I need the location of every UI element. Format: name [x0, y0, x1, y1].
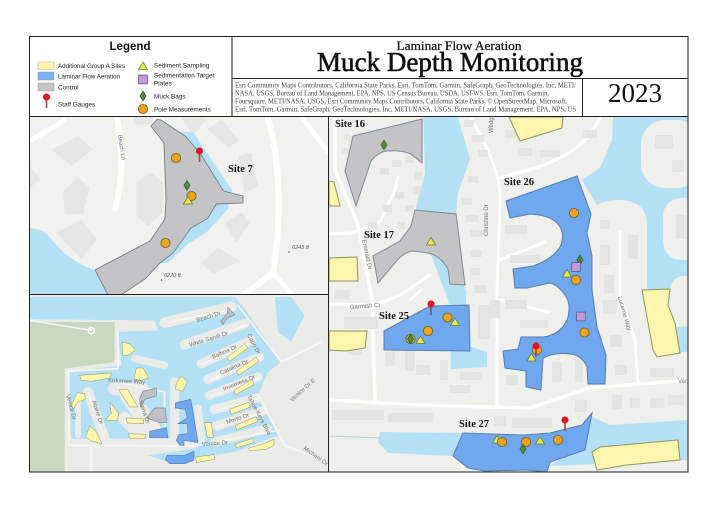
- attribution text: Foursquare, METI/NASA, USGS, Esri Community Maps Contributors, California State Parks, © OpenStreetMap, Microsoft,: [235, 98, 567, 106]
- site 7 channel water: [155, 132, 232, 263]
- legend item: additional group A sites: [38, 62, 125, 70]
- site labels: Site 27: [459, 419, 489, 430]
- site 16 control polygon: [345, 119, 422, 206]
- roads: [329, 117, 688, 438]
- legend item: control: [38, 83, 79, 92]
- elevation labels: 6220 ft: [164, 273, 181, 279]
- park: [30, 322, 115, 472]
- locator road labels: White Sandi Dr: [189, 331, 229, 349]
- site 7 control polygon: [95, 120, 243, 295]
- locator road labels: Venice Dr: [64, 394, 77, 421]
- site 27 aeration polygon: [453, 413, 592, 472]
- frame lines: [29, 36, 688, 472]
- panel: legend: [29, 36, 232, 116]
- legend item: sedimentation target plates: Plates: [154, 80, 172, 88]
- legend item: control: Control: [58, 84, 79, 92]
- locator road labels: Beach Dr: [196, 311, 222, 324]
- locator road labels: Kokanee Way: [108, 378, 145, 386]
- control polygons: [140, 307, 235, 423]
- locator road labels: Balboa Dr: [211, 344, 238, 361]
- legend item: sediment sampling: Sediment Sampling: [154, 62, 210, 70]
- locator road labels: Inverness Dr: [223, 375, 256, 393]
- road labels: Lucerne Way: [616, 296, 632, 331]
- markers site 16 and 17: [381, 140, 436, 245]
- road labels: Christine Dr: [484, 204, 490, 236]
- site 26 aeration polygon: [503, 176, 606, 390]
- site 7 lake water: [28, 227, 108, 295]
- locator road labels: Sierra Dr: [137, 400, 150, 424]
- legend item: laminar flow aeration: Laminar Flow Aeration: [58, 74, 120, 80]
- road label: beach ln: Beach Ln: [116, 134, 125, 160]
- road labels: Ven: [678, 379, 688, 385]
- legend item: laminar flow aeration: [38, 72, 120, 80]
- site labels: Site 25: [379, 311, 409, 322]
- road labels: [350, 100, 688, 385]
- panel: title block: [317, 38, 583, 77]
- legend item: sedimentation target plates: [139, 72, 215, 88]
- legend item: muck bags: [140, 91, 186, 101]
- water bodies: [378, 117, 688, 466]
- locator road labels: Venice Dr: [202, 440, 228, 448]
- panel: locator map: [29, 295, 329, 472]
- markers site 26: [527, 208, 589, 361]
- houses: [332, 120, 686, 428]
- aeration polygons: [150, 399, 198, 464]
- elevation labels: 6243 ft: [292, 245, 309, 251]
- locator road labels: [64, 311, 329, 467]
- title: Muck Depth Monitoring: [317, 47, 583, 77]
- subtitle: Laminar Flow Aeration: [396, 38, 522, 53]
- site labels: Site 17: [364, 230, 394, 241]
- panel: site 7 map: [28, 117, 328, 295]
- yellow group A sites: [71, 342, 274, 463]
- locator road labels: Alpine Dr: [90, 400, 103, 425]
- elevation labels: [161, 245, 309, 281]
- site 25 aeration polygon: [384, 305, 470, 351]
- legend item: additional group A sites: Additional Group A Sites: [58, 63, 125, 70]
- legend item: staff gauges: Staff Gauges: [58, 102, 95, 108]
- locator road labels: Tahoe Keys Blvd: [245, 394, 272, 436]
- markers site 27: [492, 416, 568, 454]
- locator road labels: Capri Dr: [245, 333, 261, 356]
- legend item: pole measurements: Pole Measurements: [154, 106, 211, 114]
- legend item: staff gauges: [43, 94, 95, 108]
- yellow group A polygons: [329, 117, 680, 470]
- legend item: sedimentation target plates: Sedimentation Target: [154, 72, 215, 80]
- site labels: [335, 119, 534, 430]
- attribution text: Esri, TomTom, Garmin, SafeGraph, GeoTechnologies, Inc, METI/NASA, USGS, Bureau of Land Management, EPA, NPS, US: [235, 106, 576, 114]
- road labels: Wedgewood: [489, 100, 495, 133]
- road labels: Emerald Dr: [360, 239, 372, 270]
- attribution text: Esri Community Maps Contributors, California State Parks, Esri, TomTom, Garmin, SafeGraph, GeoTechnologies, Inc, METI/: [235, 82, 576, 90]
- locator road labels: Morro Dr: [226, 413, 250, 426]
- locator road labels: Catalina Dr: [219, 359, 249, 377]
- panel: detail map sites 16 17 25 26 27: [329, 100, 703, 472]
- site 7 markers: [161, 148, 203, 248]
- legend heading: Legend: [110, 39, 150, 53]
- legend item: muck bags: Muck Bags: [154, 94, 186, 100]
- locator road labels: Michael Dr: [302, 446, 329, 467]
- attribution text: [235, 82, 576, 114]
- year: 2023: [608, 78, 662, 108]
- islands: [597, 120, 688, 300]
- locator road labels: Venice Dr E: [289, 378, 317, 403]
- markers site 25: [406, 300, 460, 344]
- legend item: pole measurements: [138, 104, 211, 114]
- site labels: Site 16: [335, 119, 365, 130]
- site 7 label: Site 7: [228, 164, 253, 175]
- site labels: Site 26: [504, 177, 534, 188]
- site 17 control polygon: [373, 210, 465, 285]
- attribution text: NASA, USGS, Bureau of Land Management, EPA, NPS, US Census Bureau, USDA, USFWS, Esri, TomTom, Garmin,: [235, 90, 549, 98]
- road labels: Garmish Ct: [350, 303, 381, 311]
